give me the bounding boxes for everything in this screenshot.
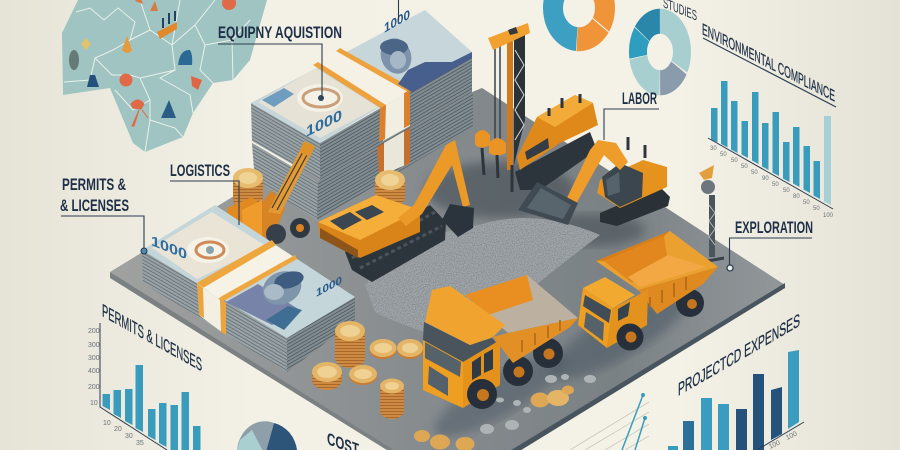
- environmental chart axis labels: 50: [813, 206, 820, 212]
- map icon: yellow diamond: [81, 38, 91, 50]
- paper band: [313, 48, 412, 142]
- environmental chart axis labels: 50: [741, 164, 748, 170]
- map icon: blue dome: [178, 50, 192, 65]
- environmental chart axis labels: 50: [720, 152, 727, 158]
- lower banknote medallion: [187, 237, 229, 263]
- lower banknote portrait: [226, 265, 307, 330]
- map icon: derrick: [157, 11, 177, 39]
- lower banknote value right: 1000: [316, 274, 342, 300]
- environmental chart axis labels: [710, 146, 834, 219]
- environmental chart axis labels: 50: [803, 200, 810, 206]
- environmental chart axis labels: 50: [731, 158, 738, 164]
- callout: labor: [604, 89, 659, 140]
- permits chart axis labels: 300: [88, 355, 100, 362]
- donut: teal and grey: [629, 9, 691, 95]
- heading: permits and licenses chart: PERMITS & LICENSES: [102, 301, 202, 376]
- dump truck: right: [578, 231, 718, 350]
- map icon: red figure: [191, 76, 202, 90]
- callout: exploration: EXPLORATION: [735, 218, 813, 237]
- permits chart axis labels: 35: [136, 440, 144, 447]
- permits chart axis labels: 10: [103, 420, 111, 427]
- coin stack: logistics: [233, 168, 263, 210]
- environmental chart axis labels: 50: [772, 182, 779, 188]
- platform: [110, 88, 785, 450]
- banknote medallion: [297, 84, 343, 112]
- map icon: navy tools: [87, 75, 99, 87]
- environmental chart axis labels: 90: [762, 176, 769, 182]
- banknote face: [251, 10, 472, 143]
- permits chart axis labels: 200: [88, 328, 100, 335]
- map panel: [62, 0, 267, 152]
- projected chart axis labels: 100: [785, 430, 799, 442]
- pie chart: bottom: [237, 421, 297, 450]
- callout: labor: LABOR: [622, 89, 657, 108]
- map icon: red rig: [131, 100, 148, 126]
- banknote value top: 1000: [384, 6, 410, 36]
- environmental chart axis labels: 30: [710, 146, 717, 152]
- gravel pile: [365, 218, 600, 340]
- pebbles: [480, 374, 596, 434]
- portrait: [376, 34, 472, 92]
- loader machine: [227, 141, 315, 245]
- callout: equipment acquisition: EQUIPNY AQUISTION: [218, 23, 342, 42]
- banknote value: 1000: [306, 107, 342, 141]
- callout: permits and licenses: & LICENSES: [60, 196, 129, 215]
- permits chart axis labels: 30: [125, 433, 133, 440]
- leader from top: [398, 0, 400, 20]
- environmental chart axis labels: 80: [793, 194, 800, 200]
- low coin stack: [312, 362, 342, 390]
- environmental chart axis labels: 50: [783, 188, 790, 194]
- permits chart axis labels: 20: [114, 426, 122, 433]
- environmental chart axis labels: 50: [751, 170, 758, 176]
- permits chart axis labels: 200: [88, 384, 100, 391]
- permits chart axis labels: 400: [88, 368, 100, 375]
- rule under environmental compliance: [703, 38, 836, 107]
- coin stack: behind excavator: [375, 170, 405, 207]
- map icon: mountain: [161, 100, 176, 118]
- bar chart: environmental compliance: [708, 81, 834, 219]
- callout: permits and licenses: [60, 175, 147, 254]
- permits chart axis labels: [88, 328, 144, 447]
- coin pair: [349, 365, 377, 385]
- callout: logistics: [170, 161, 239, 225]
- map icon: red marker: [120, 74, 132, 86]
- line chart: projected: [570, 393, 649, 450]
- center excavator: [318, 140, 474, 282]
- bar chart: permits and licenses: [88, 323, 200, 450]
- donut: orange and blue: [551, 0, 613, 42]
- map icon: orange pin: [122, 36, 132, 53]
- drill rig: [475, 23, 598, 192]
- bar chart: projected expenses: [668, 350, 804, 450]
- single coin left: [370, 339, 396, 359]
- single coin right: [397, 339, 423, 359]
- exploration drill: [699, 165, 724, 262]
- callout: exploration: [727, 218, 813, 271]
- dump truck: left: [423, 275, 578, 409]
- permits chart axis labels: 10: [90, 400, 98, 407]
- coins: front group: [312, 321, 574, 450]
- environmental chart axis labels: 100: [823, 213, 834, 219]
- lower paper band: [197, 240, 297, 335]
- heading: projected expenses: PROJECTCD EXPENSES: [678, 310, 800, 401]
- map icon: red top marker: [222, 0, 236, 10]
- right excavator: [518, 137, 670, 226]
- tall coin stack: [335, 321, 365, 368]
- money stack: lower: [142, 205, 355, 372]
- projected chart axis labels: [768, 430, 799, 450]
- permits chart axis labels: 300: [88, 342, 100, 349]
- callout: logistics: LOGISTICS: [170, 161, 230, 180]
- lower banknote value: 1000: [151, 233, 187, 263]
- map icon: grey rock: [69, 50, 79, 70]
- callout: permits and licenses: PERMITS &: [62, 175, 126, 194]
- callout: equipment acquisition: [218, 23, 342, 98]
- map icon: triangles: [135, 0, 158, 11]
- narrow coin stack: [380, 378, 404, 419]
- money stack: upper pair: [251, 6, 473, 220]
- small coins: [414, 386, 574, 450]
